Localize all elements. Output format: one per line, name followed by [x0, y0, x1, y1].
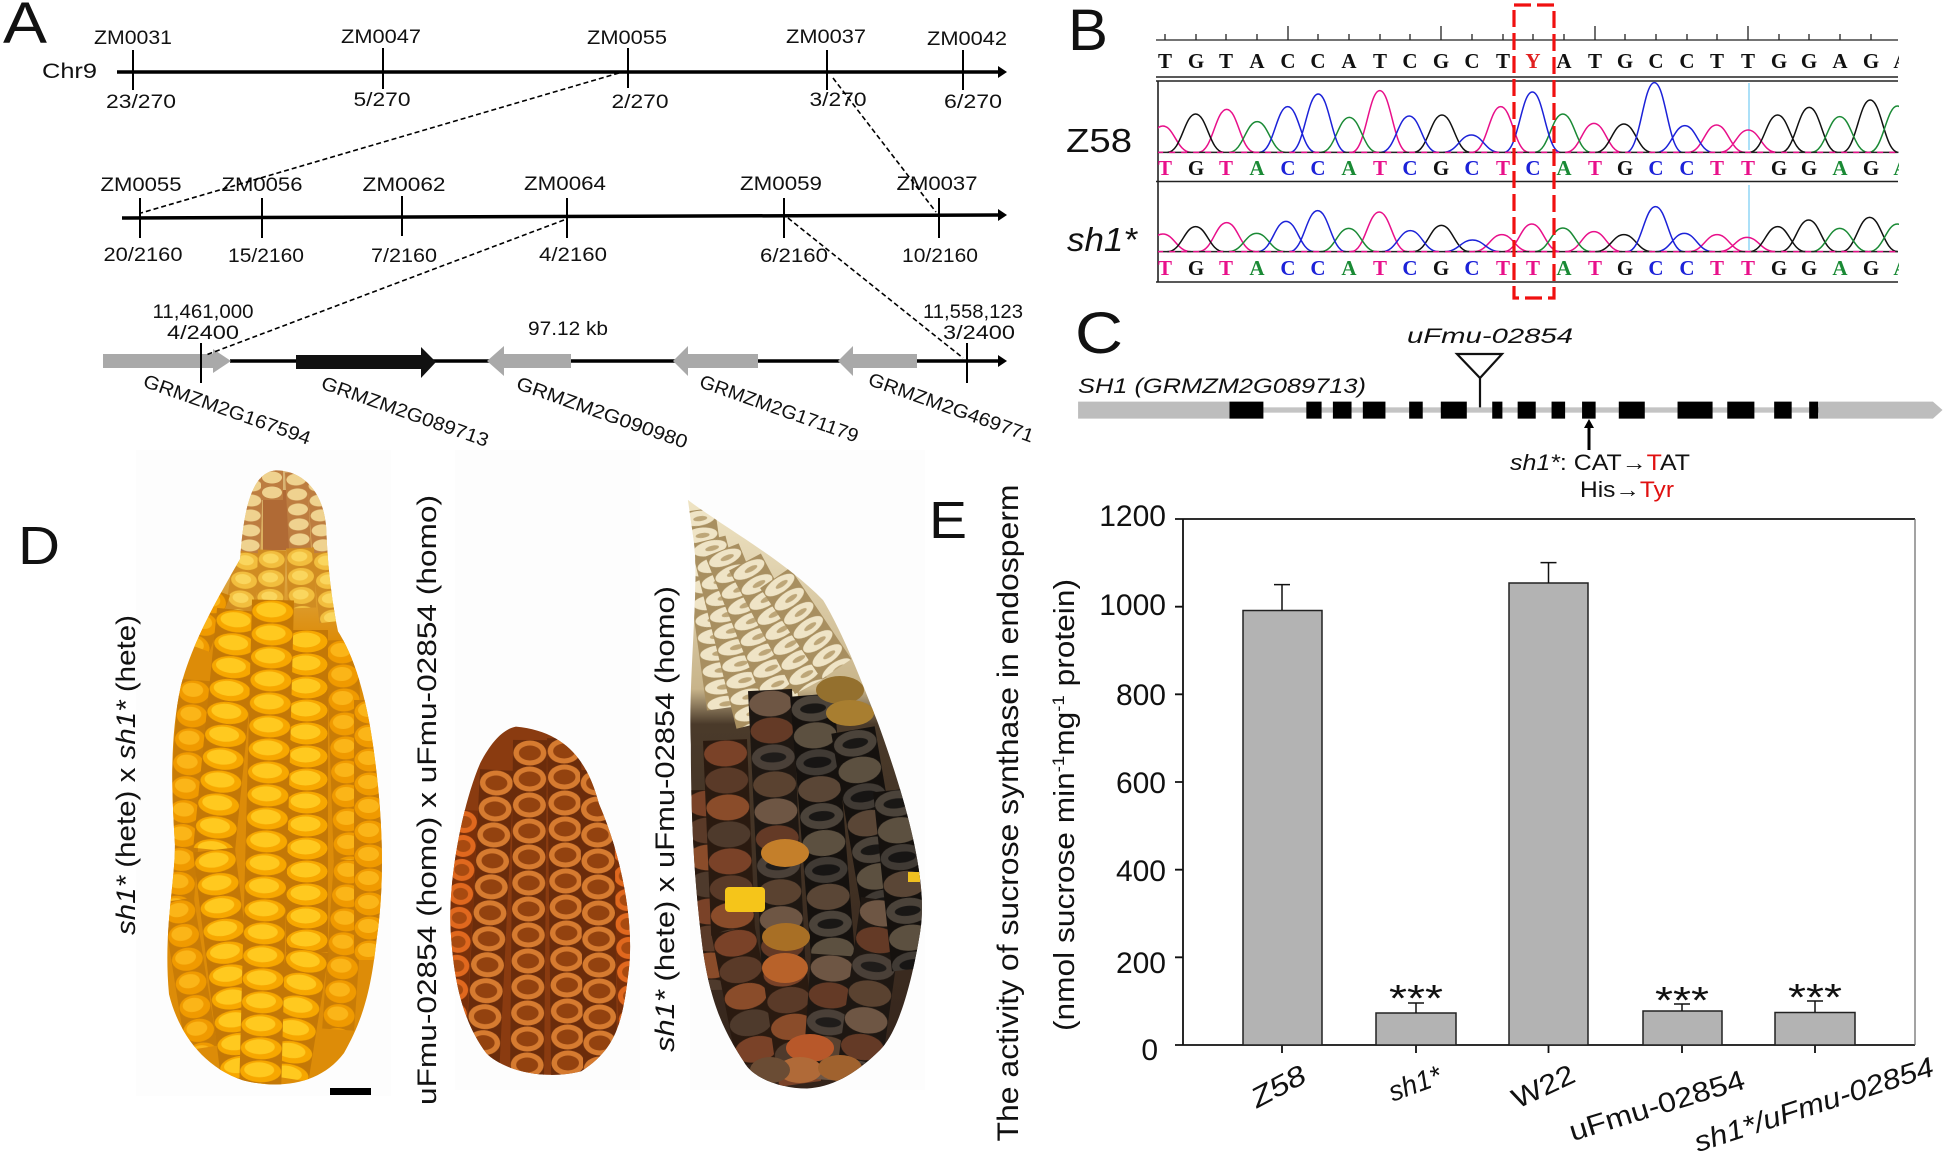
sh1 called bases [1158, 261, 1899, 275]
panel: E bar chart [929, 484, 1938, 1158]
Z58 called bases: G [1188, 156, 1204, 180]
sh1 called bases: GG [1771, 256, 1817, 280]
Z58 called bases: C [1402, 156, 1418, 180]
y axis tick labels: 400 [1116, 855, 1166, 888]
sh1 called bases: C [1464, 256, 1480, 280]
gene row: 97.12 kb [528, 318, 608, 340]
Z58 called bases: T [1588, 156, 1602, 180]
axis arrow [122, 196, 1007, 238]
trace frames [1156, 77, 1898, 282]
mutation codon text: sh1* : CAT→ TAT [1510, 450, 1690, 475]
Z58 black peaks [1167, 100, 1898, 152]
fine map row: ZM0055 [100, 174, 182, 196]
y axis tick labels: 800 [1116, 679, 1166, 712]
gene row [103, 301, 1036, 453]
consensus sequence: TGTACCATCGCT [1158, 49, 1510, 73]
insertion triangle [1457, 354, 1502, 410]
bar: W22 [1509, 583, 1588, 1045]
chromosome 9 map row: 2/270 [612, 91, 669, 113]
x axis labels: sh1* [1384, 1059, 1446, 1107]
ear 2 photo [450, 726, 630, 1075]
sh1 called bases: TT [1710, 256, 1755, 280]
plot frame and ticks [1175, 519, 1915, 1053]
y axis units: -1 [1049, 756, 1068, 772]
gene row: GRMZM2G090980 [513, 374, 690, 453]
ruler [1156, 26, 1898, 40]
label: uFmu-02854: uFmu-02854 [1407, 324, 1573, 348]
y axis tick labels: 0 [1141, 1034, 1158, 1067]
Z58 called bases: G [1863, 156, 1879, 180]
bar: uFmu-02854 [1643, 1011, 1722, 1045]
fine map row [100, 173, 1007, 267]
x axis labels: sh1*/uFmu-02854 [1690, 1051, 1938, 1158]
chromosome 9 map row [42, 26, 1007, 113]
sh1 called bases: G [1617, 256, 1633, 280]
fine map row: ZM0059 [740, 173, 822, 195]
label: ear 1 genotype: sh1* (hete) x sh1* (hete) [111, 615, 141, 935]
y axis units: protein) [1049, 579, 1081, 695]
Z58 called bases: A [1832, 156, 1848, 180]
chromosome 9 map row: ZM0037 [786, 26, 866, 48]
gene row: GRMZM2G167594 [140, 371, 314, 450]
gene row: 11,461,000 [152, 301, 254, 323]
gene arrow: GRMZM2G090980 [487, 346, 571, 376]
sh1 called bases: A [1341, 256, 1357, 280]
consensus sequence [1158, 54, 1899, 68]
y axis tick labels: 200 [1116, 947, 1166, 980]
sh1 black peaks [1167, 217, 1898, 252]
sh1 called bases: TT [1496, 256, 1540, 280]
label: Chr9: Chr9 [42, 60, 97, 83]
Z58 called bases: A [1341, 156, 1357, 180]
heading: C: C [1075, 301, 1123, 366]
gene row: 4/2400 [167, 322, 239, 344]
Z58 called bases: A [1556, 156, 1572, 180]
chromosome 9 map row: 6/270 [944, 91, 1002, 113]
y axis title: The activity of sucrose synthase in endosperm [992, 484, 1025, 1142]
y axis units: -1 [1049, 695, 1068, 712]
marker lines [1748, 83, 1750, 250]
fine map row: 15/2160 [228, 245, 304, 267]
sh1 pink peaks [1135, 212, 1775, 252]
Z58 called bases: T [1219, 156, 1233, 180]
Z58 called bases: C [1464, 156, 1480, 180]
label: Z58: Z58 [1066, 122, 1132, 159]
sh1 called bases: A [1556, 256, 1572, 280]
x axis labels: Z58 [1244, 1059, 1312, 1114]
chromosome 9 map row: ZM0047 [341, 26, 421, 48]
fine map row: 20/2160 [104, 244, 183, 266]
chromatogram traces [1135, 83, 1926, 252]
fine map row: 7/2160 [371, 245, 437, 267]
significance stars [1389, 977, 1842, 1022]
sh1 called bases: CC [1280, 256, 1326, 280]
panel: C gene structure [1075, 301, 1943, 502]
gene arrow: GRMZM2G089713 [296, 347, 436, 378]
fine map row: 6/2160 [760, 245, 828, 267]
chromosome 9 map row: ZM0031 [94, 27, 172, 49]
sh1 called bases: G [1863, 256, 1879, 280]
x axis labels: W22 [1507, 1058, 1580, 1114]
sh1 called bases: A [1893, 256, 1909, 280]
y axis tick labels: 1200 [1099, 500, 1166, 533]
panel: B sequencing chromatogram [1066, 0, 1926, 298]
heading: D: D [18, 516, 60, 576]
fine map row: ZM0056 [222, 174, 302, 196]
gene row: 3/2400 [943, 322, 1015, 344]
sh1 blue peaks [1258, 207, 1713, 252]
panel: D maize ears [18, 450, 936, 1105]
ear 1 photo [167, 470, 382, 1084]
label: SH1 gene name: SH1 (GRMZM2G089713) [1078, 374, 1366, 398]
Z58 called bases [1158, 161, 1899, 175]
sh1 green peaks [1228, 224, 1926, 252]
scale bar [330, 1088, 371, 1095]
sh1 called bases: T [1158, 256, 1172, 280]
Z58 called bases: T [1373, 156, 1387, 180]
sh1 called bases: T [1588, 256, 1602, 280]
dashed zoom lines [141, 73, 963, 358]
fine map row: ZM0037 [896, 173, 978, 195]
label: ear 2 genotype: uFmu-02854 (homo) x uFmu-02854 (homo) [412, 495, 442, 1105]
sh1 called bases: C [1402, 256, 1418, 280]
heading: E: E [929, 492, 967, 550]
red dashed highlight box [1514, 5, 1554, 298]
fine map row: ZM0062 [362, 174, 446, 196]
y axis tick labels [1099, 500, 1166, 1067]
Z58 green peaks [1229, 106, 1926, 152]
significance stars: *** [1389, 978, 1443, 1020]
x axis labels [1244, 1051, 1938, 1158]
sh1 called bases: G [1188, 256, 1204, 280]
bar: Z58 [1243, 610, 1322, 1045]
Z58 called bases: C [1525, 156, 1541, 180]
bar: sh1* [1376, 1013, 1456, 1045]
chromosome 9 map row: ZM0055 [587, 27, 667, 49]
consensus sequence: Y [1525, 49, 1541, 73]
axis arrow [117, 48, 1007, 90]
Z58 called bases: GG [1771, 156, 1817, 180]
chromosome 9 map row: 23/270 [106, 91, 176, 113]
gene row: GRMZM2G171179 [697, 372, 861, 447]
chromosome 9 map row: 3/270 [810, 89, 867, 111]
gene arrow: GRMZM2G469771 [838, 346, 917, 376]
y axis tick labels: 600 [1116, 767, 1166, 800]
amino acid change text: His→ Tyr [1580, 477, 1674, 502]
y axis tick labels: 1000 [1099, 589, 1166, 622]
gene row: GRMZM2G469771 [865, 370, 1036, 447]
Z58 called bases: A [1249, 156, 1265, 180]
gene arrow: GRMZM2G167594 [103, 349, 231, 373]
sh1 called bases: CC [1648, 256, 1695, 280]
sh1 called bases: G [1433, 256, 1449, 280]
Z58 called bases: CC [1280, 156, 1326, 180]
Z58 called bases: T [1496, 156, 1510, 180]
y axis units: (nmol sucrose min [1049, 794, 1081, 1031]
Z58 blue peaks [1259, 83, 1713, 152]
x axis labels: uFmu-02854 [1565, 1064, 1748, 1147]
sh1 called bases: A [1832, 256, 1848, 280]
significance stars: *** [1788, 977, 1842, 1019]
consensus sequence: ATGCCTTGGAGA [1556, 49, 1909, 73]
sh1 called bases: T [1219, 256, 1233, 280]
Z58 called bases: G [1433, 156, 1449, 180]
panel: A genetic map [3, 0, 1036, 453]
Z58 called bases: G [1617, 156, 1633, 180]
Z58 called bases: CC [1648, 156, 1695, 180]
Z58 called bases: TT [1710, 156, 1755, 180]
Z58 called bases: T [1158, 156, 1172, 180]
fine map row: ZM0064 [524, 173, 606, 195]
ear 3 photo [688, 500, 922, 1088]
bar: sh1*/uFmu-02854 [1775, 1012, 1855, 1045]
photo backgrounds [136, 450, 925, 1096]
Z58 pink peaks [1135, 91, 1776, 152]
sh1 called bases: T [1373, 256, 1387, 280]
chromosome 9 map row: ZM0042 [927, 28, 1007, 50]
axis arrow [230, 355, 1007, 367]
gene arrow: GRMZM2G171179 [673, 346, 758, 376]
y axis units: mg [1049, 712, 1081, 756]
fine map row: 10/2160 [902, 245, 978, 267]
label: sh1*: sh1* [1067, 221, 1138, 258]
gene model [1078, 402, 1943, 419]
Z58 called bases: A [1893, 156, 1909, 180]
significance stars: *** [1655, 980, 1709, 1022]
gene row: GRMZM2G089713 [318, 373, 491, 452]
sh1 called bases: A [1249, 256, 1265, 280]
label: ear 3 genotype: sh1* (hete) x uFmu-02854 (homo) [650, 586, 680, 1052]
mutation arrow [1584, 419, 1594, 450]
fine map row: 4/2160 [539, 244, 607, 266]
gene row: 11,558,123 [923, 301, 1023, 323]
chromosome 9 map row: 5/270 [354, 89, 411, 111]
error bars [1274, 563, 1823, 1013]
